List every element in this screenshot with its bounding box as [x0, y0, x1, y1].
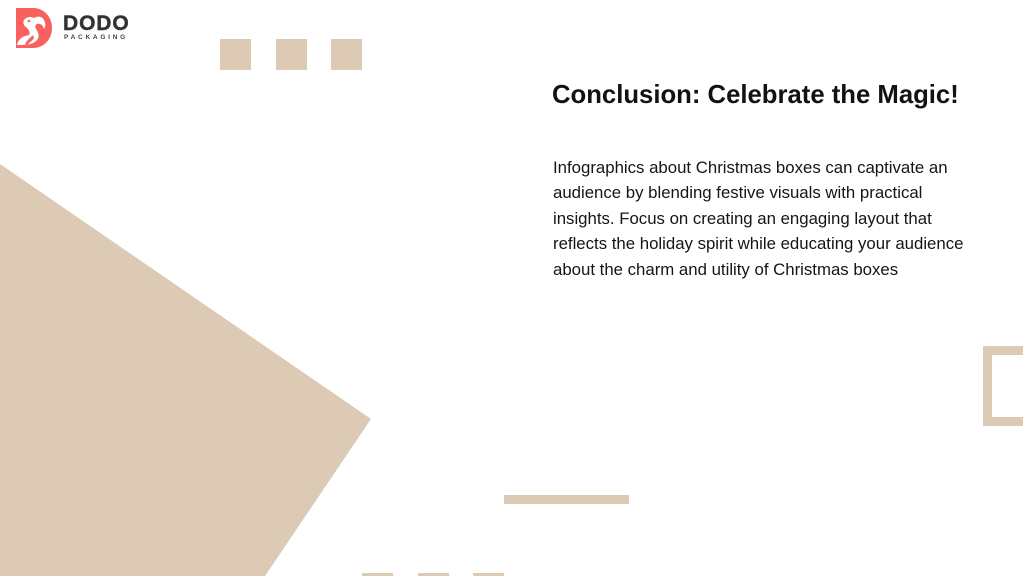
logo wordmark: DODO [63, 12, 130, 35]
bottom squares [362, 573, 504, 576]
top squares [220, 39, 362, 70]
logo [16, 8, 130, 48]
body text [553, 158, 963, 278]
body text: audience by blending festive visuals with practical [553, 183, 922, 202]
body text: insights. Focus on creating an engaging layout that [553, 208, 932, 228]
heading: Conclusion: Celebrate the Magic! [552, 81, 959, 109]
icon: dodo bird [16, 8, 52, 48]
body text: reflects the holiday spirit while educating your audience [553, 234, 963, 253]
horizontal bar [504, 495, 629, 504]
logo tagline: PACKAGING [64, 34, 128, 41]
body text: Infographics about Christmas boxes can captivate an [553, 158, 948, 176]
body text: about the charm and utility of Christmas boxes [553, 260, 898, 278]
right bracket [983, 346, 1023, 426]
